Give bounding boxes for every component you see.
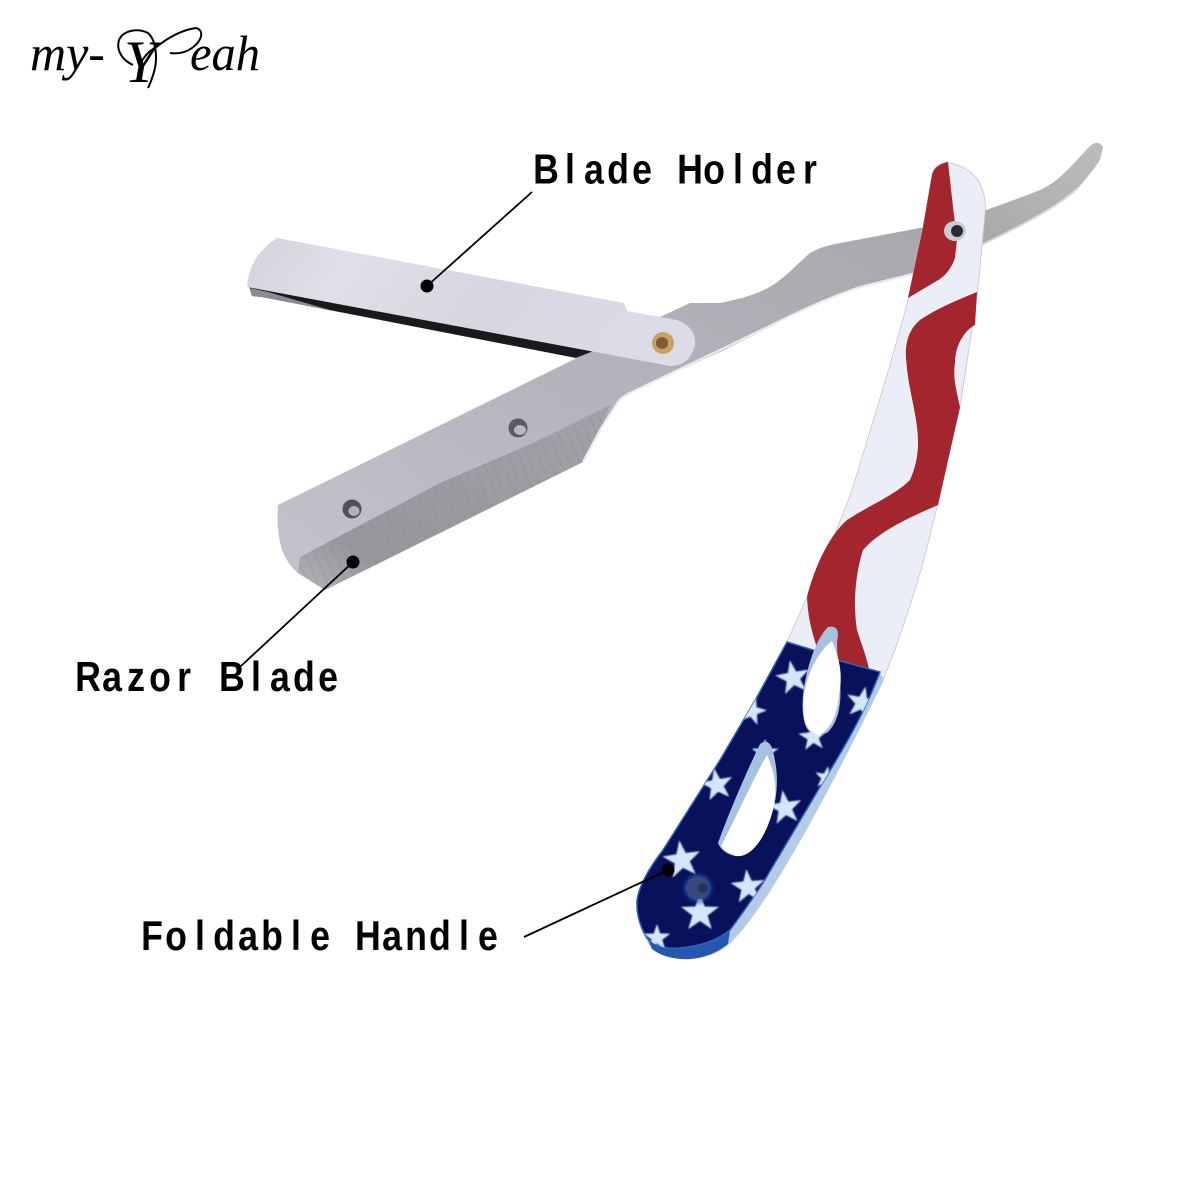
logo: my-Yeah: Y	[124, 29, 163, 95]
logo: my-Yeah	[30, 25, 260, 95]
blade holder	[247, 238, 695, 366]
slot upper	[803, 627, 841, 735]
logo: my-Yeah: my-	[30, 25, 105, 81]
handle bottom hole	[680, 870, 716, 906]
brass pin	[652, 332, 674, 354]
blue edge band	[647, 930, 730, 959]
slot highlight	[250, 288, 330, 310]
blade polished edge	[583, 271, 925, 462]
leader line: Razor Blade	[241, 556, 360, 666]
white stars	[644, 657, 881, 949]
label: Foldable Handle: Foldable Handle	[141, 913, 498, 960]
logo: my-Yeah: eah	[190, 25, 260, 81]
red wave	[807, 292, 977, 669]
red stripe top	[908, 162, 957, 298]
lower edge tint	[650, 672, 884, 959]
blade hole upper	[508, 418, 528, 438]
bevel hatch	[298, 405, 610, 590]
label: Blade Holder: Blade Holder	[533, 147, 817, 193]
slot lower	[718, 742, 777, 856]
stars panel	[637, 642, 880, 948]
tip polished edge	[975, 188, 1078, 248]
razor tang tip	[975, 143, 1103, 248]
handle outer edge	[637, 162, 985, 959]
label: Razor Blade: Razor Blade	[75, 654, 338, 701]
handle pin	[944, 221, 966, 241]
blade hole lower	[342, 500, 362, 518]
foldable handle	[637, 162, 985, 959]
leader line: Blade Holder	[420, 192, 532, 292]
blade bevel	[298, 405, 610, 590]
razor blade	[278, 227, 925, 590]
dark blade slot under holder	[249, 286, 596, 358]
leader line: Foldable Handle	[524, 864, 674, 937]
